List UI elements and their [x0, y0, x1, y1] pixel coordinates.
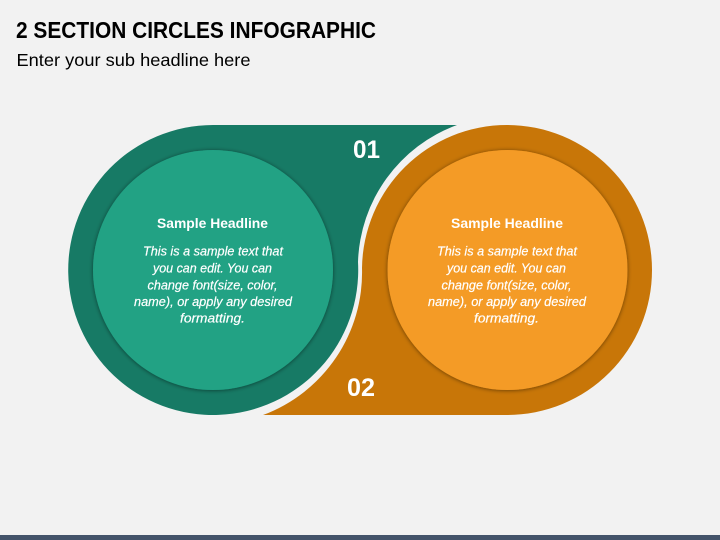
orange outer shape [263, 125, 652, 415]
body text right: This is a sample text that [437, 245, 578, 259]
body text left: change font(size, color, [148, 278, 278, 292]
green outer shape [68, 125, 457, 415]
body text right: name), or apply any desired [428, 295, 587, 309]
title: 2 SECTION CIRCLES INFOGRAPHIC [16, 17, 376, 43]
body text left: formatting. [180, 312, 245, 326]
number 01: 01 [353, 136, 380, 164]
body text right: change font(size, color, [442, 278, 572, 292]
body text left: you can edit. You can [152, 261, 272, 275]
panel: section 02 orange [263, 125, 652, 415]
headline left: Sample Headline [157, 215, 268, 231]
body text left: This is a sample text that [143, 245, 284, 259]
number 02: 02 [347, 374, 375, 402]
headline right: Sample Headline [451, 215, 563, 231]
bottom bar [0, 535, 720, 540]
green inner circle [93, 150, 333, 390]
body text left [134, 245, 293, 326]
panel: section 01 green [68, 125, 457, 415]
subtitle: Enter your sub headline here [16, 50, 250, 70]
body text right [428, 245, 587, 326]
body text right: formatting. [474, 312, 539, 326]
body text left: name), or apply any desired [134, 295, 293, 309]
orange inner circle [388, 150, 628, 390]
body text right: you can edit. You can [446, 261, 566, 275]
